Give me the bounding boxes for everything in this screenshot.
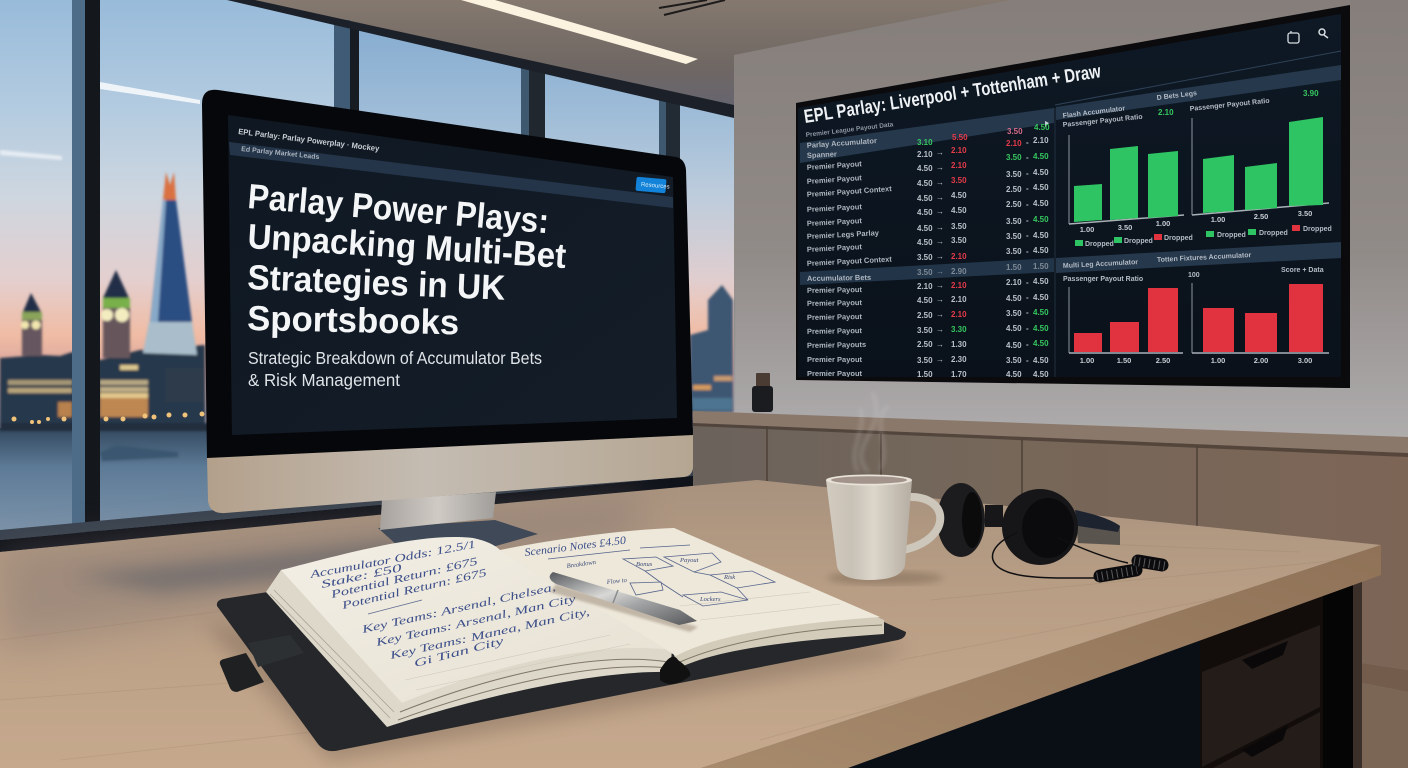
upper chart legends: Dropped [1303,226,1332,233]
table odds values: 2.10 [917,150,933,159]
shadow under monitor [70,540,400,592]
table odds values: 3.30 [951,325,967,334]
table odds values: - [1026,356,1029,365]
table odds values: 3.50 [1006,153,1022,162]
table row labels: Premier Payout [807,298,863,308]
floor [1362,683,1408,768]
table row labels: Spanner [807,149,837,160]
table odds values: 3.50 [1006,170,1022,179]
upper chart legends: Dropped [1259,230,1288,237]
background: wall [734,0,1408,460]
table odds values: 4.50 [1033,215,1049,224]
table odds values: 4.50 [1006,324,1022,333]
spine [660,657,690,684]
handwritten diagram right page: Breakdown [566,559,596,570]
table odds values: 4.50 [1006,370,1022,379]
handwritten notes left page: Key Teams: Arsenal, Chelsea, [360,581,557,636]
handwritten notes left page: Stake: £50 [320,562,404,591]
table odds values: 4.50 [917,194,933,203]
table odds values: - [1026,200,1029,209]
table odds values: 2.10 [951,281,967,290]
table odds values: → [936,223,944,232]
table odds values: 2.10 [951,252,967,261]
table odds values: 2.10 [951,161,967,170]
table header band [800,108,1054,163]
ceiling [250,0,1010,110]
table odds values: 4.50 [1033,308,1049,317]
red bar chart 2: 1.00 [1211,356,1225,365]
TV lower bezel [796,377,1350,388]
table odds values: 3.50 [1007,127,1023,136]
monitor stand base [378,520,538,562]
table odds values [917,123,1050,379]
table odds values: 3.50 [917,253,933,262]
table odds values: 4.50 [917,164,933,173]
monitor bezel [202,90,693,458]
table odds values: - [1026,340,1029,349]
upper chart legends: Dropped [1217,232,1246,239]
table row labels: Premier Payout Context [807,255,893,268]
table odds values: - [1026,216,1029,225]
table odds values: - [1026,153,1029,162]
handwritten diagram right page [524,535,775,606]
table odds values: 2.50 [917,340,933,349]
leather cover [217,592,906,751]
window sill frame [0,462,735,540]
lower chart band [1056,242,1341,273]
table row labels: Premier Payout [807,173,863,186]
table odds values: 4.50 [1033,339,1049,348]
table odds values: 3.50 [917,356,933,365]
window panes with London skyline [0,0,734,540]
play icon [1045,121,1049,127]
table odds values: 2.10 [1006,139,1022,148]
green bar chart 2: 3.50 [1298,209,1312,218]
table odds values: 2.30 [951,355,967,364]
table odds values: 4.50 [1033,231,1049,240]
red bar chart 1: 1.00 [1080,356,1094,365]
upper drawer handle [1242,641,1288,669]
credenza plinth [1362,663,1408,692]
steam above mug [854,392,888,472]
green bar chart 1: 1.00 [1156,219,1170,228]
handwritten diagram right page: Bonus [636,561,653,568]
handwritten notes left page: Potential Return: £675 [329,555,480,601]
table odds values: 4.50 [917,179,933,188]
top chart band text [1062,89,1319,129]
strap tab [220,653,264,692]
coiled cord [1097,561,1165,577]
table odds values: 3.50 [951,222,967,231]
table odds values: 3.50 [917,268,933,277]
handwritten notes left page: Accumulator Odds: 12.5/1 [308,539,477,581]
table odds values: 1.70 [951,370,967,379]
table column divider [1054,108,1056,377]
lower chart band text: Totten Fixtures Accumulator [1157,252,1252,264]
table odds values: 4.50 [1033,277,1049,286]
lower chart band text: 100 [1188,272,1200,279]
table odds values: - [1026,138,1029,147]
table odds values: → [936,355,944,364]
boat [100,445,178,461]
handwritten notes left page: Key Teams: Manea, Man City, [388,606,591,662]
table odds values: 4.50 [1033,168,1049,177]
monitor subtitle: & Risk Management [248,370,400,390]
table odds values: 2.10 [1006,278,1022,287]
handwritten diagram right page: Payout [679,557,699,564]
top chart band text: Passenger Payout Ratio [1189,98,1270,113]
monitor title: Sportsbooks [247,299,460,342]
table odds values: 3.50 [951,176,967,185]
table row labels: Premier Payout [807,242,863,254]
TV screen [798,14,1341,377]
table odds values: 1.50 [1033,262,1049,271]
left page block [266,550,672,727]
table row labels: Premier Payout [807,369,863,378]
table odds values: 3.50 [951,236,967,245]
TV icon: search [1319,29,1328,38]
table odds values: 4.50 [1033,324,1049,333]
red bar chart 1: 1.50 [1117,356,1131,365]
right page block [500,528,884,668]
top chart band text: Passenger Payout Ratio [1062,114,1143,129]
table odds values: 4.50 [1033,356,1049,365]
table odds values: 4.50 [1033,199,1049,208]
lower chart band text [1063,252,1324,283]
upper chart legends: Dropped [1164,235,1193,242]
desk left back shade [0,495,640,650]
table odds values: 3.50 [917,326,933,335]
left page [281,537,676,703]
table odds values: 4.50 [1033,293,1049,302]
table odds values: 3.50 [1006,232,1022,241]
desk surface [0,480,1381,768]
table odds values: 2.10 [951,146,967,155]
table odds values: 4.50 [1033,183,1049,192]
monitor header text: EPL Parlay: Parlay Powerplay · Mockey [238,127,380,153]
monitor subtitle [248,348,542,390]
clock tower right [101,270,130,358]
table odds values: 1.50 [1006,263,1022,272]
table odds values: 2.50 [1006,200,1022,209]
monitor screen [228,115,677,435]
TV title: EPL Parlay: Liverpool + Tottenham + Draw [803,61,1102,128]
green bar chart 1: 1.00 [1080,225,1094,234]
table row labels [807,136,893,378]
red bar chart 1: 2.50 [1156,356,1170,365]
green bar chart 1 [1069,135,1184,234]
table odds values: 2.10 [917,282,933,291]
handwritten diagram right page: Flow to [605,577,628,586]
top chart band [1056,65,1341,120]
lit building bands [8,380,72,385]
red bar chart 2: 2.00 [1254,356,1268,365]
notebook [205,528,910,762]
handwritten notes left page: Gi Tian City [413,635,505,670]
table odds values: → [936,178,944,187]
headband [985,505,1003,527]
table odds values: → [936,267,944,276]
table odds values: → [936,193,944,202]
green bar chart 2: 2.50 [1254,212,1268,221]
green bar chart 1: 3.50 [1118,223,1132,232]
table odds values: 2.50 [917,311,933,320]
water [0,428,734,540]
table odds values: - [1026,293,1029,302]
street lights [12,412,204,424]
table odds values: 2.50 [1006,185,1022,194]
TV subtitle: Premier League Payout Data [805,121,894,139]
table odds values: 2.10 [951,310,967,319]
red bar chart 2 [1192,283,1329,365]
left ear cup [937,483,985,557]
lower drawer [1213,712,1320,768]
table row labels: Premier Payout [807,202,863,214]
table odds values: → [936,295,944,304]
table odds values: - [1026,278,1029,287]
table odds values: → [936,340,944,349]
table row labels: Parlay Accumulator [807,136,877,150]
green bar chart 2 [1192,117,1329,224]
table odds values: 4.50 [917,224,933,233]
handwritten diagram right page: Scenario Notes £4.50 [524,535,627,559]
table odds values: 4.50 [951,206,967,215]
upper chart legends [1075,225,1332,248]
table odds values: → [936,237,944,246]
window mullions and frame [0,0,757,552]
table odds values: - [1026,308,1029,317]
coffee mug [826,474,943,585]
TV header line [1055,51,1341,105]
table odds values: - [1026,169,1029,178]
table row labels: Premier Payout [807,216,863,228]
table row labels: Premier Payout [807,326,863,336]
table odds values: - [1026,231,1029,240]
monitor button [635,177,670,193]
pen [550,572,698,632]
table odds values: 4.50 [1033,152,1049,161]
headphones [937,483,1165,578]
handwritten notes left page: Key Teams: Arsenal, Man City [374,593,577,649]
monitor [202,90,693,562]
table odds values: 4.50 [1006,294,1022,303]
table row labels: Premier Payout [807,355,863,364]
top chart band text: 3.90 [1303,89,1319,98]
table odds values: 5.50 [952,133,968,142]
shard tower [143,172,197,355]
desk pedestal with drawers [840,582,1362,768]
desk front edge [701,545,1381,768]
page ruled lines [405,592,840,690]
strap [248,635,304,667]
table odds values: 2.10 [1033,136,1049,145]
table row labels: Accumulator Bets [807,273,871,283]
table odds values: 3.50 [1006,217,1022,226]
table odds values: 1.30 [951,340,967,349]
handwritten notes left page [308,539,591,670]
top chart band text: Flash Accumulator [1062,105,1126,120]
table odds values: - [1026,324,1029,333]
monitor subtitle: Strategic Breakdown of Accumulator Bets [248,348,542,368]
window glass reflections [100,82,200,104]
credenza cabinet along wall [693,411,1408,768]
table odds values: → [936,281,944,290]
lower chart band text: Multi Leg Accumulator [1063,259,1138,270]
table row labels: Premier Payout Context [807,184,892,199]
table section band [800,258,1054,285]
table row labels: Premier Payout [807,285,863,295]
table odds values: 4.50 [951,191,967,200]
monitor title: Unpacking Multi-Bet [246,217,568,276]
window head frame [227,0,734,118]
ceiling light strip [461,0,698,64]
clock tower left [21,293,42,356]
monitor nav text: Ed Parlay Market Leads [241,146,320,161]
table odds values: 2.10 [951,295,967,304]
table odds values: → [936,252,944,261]
table odds values: 4.50 [1006,341,1022,350]
table odds values: → [936,163,944,172]
table row labels: Premier Legs Parlay [807,228,880,241]
table odds values: 4.50 [1034,123,1050,132]
red bar chart 2: 3.00 [1298,356,1312,365]
table odds values: 3.50 [1006,247,1022,256]
lower chart band text: Score + Data [1281,267,1324,274]
headphone cable [992,532,1095,578]
page block edge lines [270,590,394,718]
right ear cup [1002,489,1078,565]
table odds values: 4.50 [917,208,933,217]
handwritten diagram right page: Lockers [699,596,721,603]
table odds values: 4.50 [1033,370,1049,379]
table odds values: → [936,207,944,216]
upper chart legends: Dropped [1124,238,1153,245]
TV bezel [796,5,1350,388]
table odds values: 4.50 [917,238,933,247]
table odds values: 1.50 [917,370,933,379]
table odds values: → [936,325,944,334]
right page [500,528,880,656]
table odds values: 3.50 [1006,356,1022,365]
table odds values: → [936,148,944,157]
monitor title [246,177,568,342]
tower buildings right pane [690,285,733,412]
handwritten diagram right page: Risk [723,574,735,581]
vase on credenza [752,373,773,412]
table odds values: 4.50 [1033,246,1049,255]
lower drawer handle [1242,725,1288,757]
monitor title: Parlay Power Plays: [246,177,551,241]
monitor button: Resources [641,182,670,191]
red bar chart 1 [1069,287,1183,365]
table row labels: Premier Payout [807,159,863,172]
table odds values: 2.90 [951,267,967,276]
table odds values: 4.50 [917,296,933,305]
green bar chart 2: 1.00 [1211,215,1225,224]
table row labels: Premier Payout [807,312,863,322]
TV icon: window [1288,31,1299,43]
ceiling vent [659,0,725,15]
monitor chin [207,433,693,513]
table odds values: - [1026,247,1029,256]
monitor title: Strategies in UK [247,258,506,308]
lower chart band text: Passenger Payout Ratio [1063,276,1143,283]
table odds values: 3.50 [1006,309,1022,318]
table row labels: Premier Payouts [807,340,866,350]
monitor stand neck [380,492,496,530]
notebook shadow [205,625,910,762]
top chart band text: D Bets Legs [1156,90,1198,102]
distant city blocks [0,172,733,461]
table odds values: → [936,310,944,319]
table odds values: - [1026,184,1029,193]
upper chart legends: Dropped [1085,241,1114,248]
top chart band text: 2.10 [1158,108,1174,117]
upper drawer [1202,625,1320,767]
page edge lines [398,625,882,720]
monitor nav bar [229,142,673,208]
wall TV [796,5,1350,388]
handwritten notes left page: Potential Return: £675 [340,567,489,612]
table odds values: 3.10 [917,138,933,147]
